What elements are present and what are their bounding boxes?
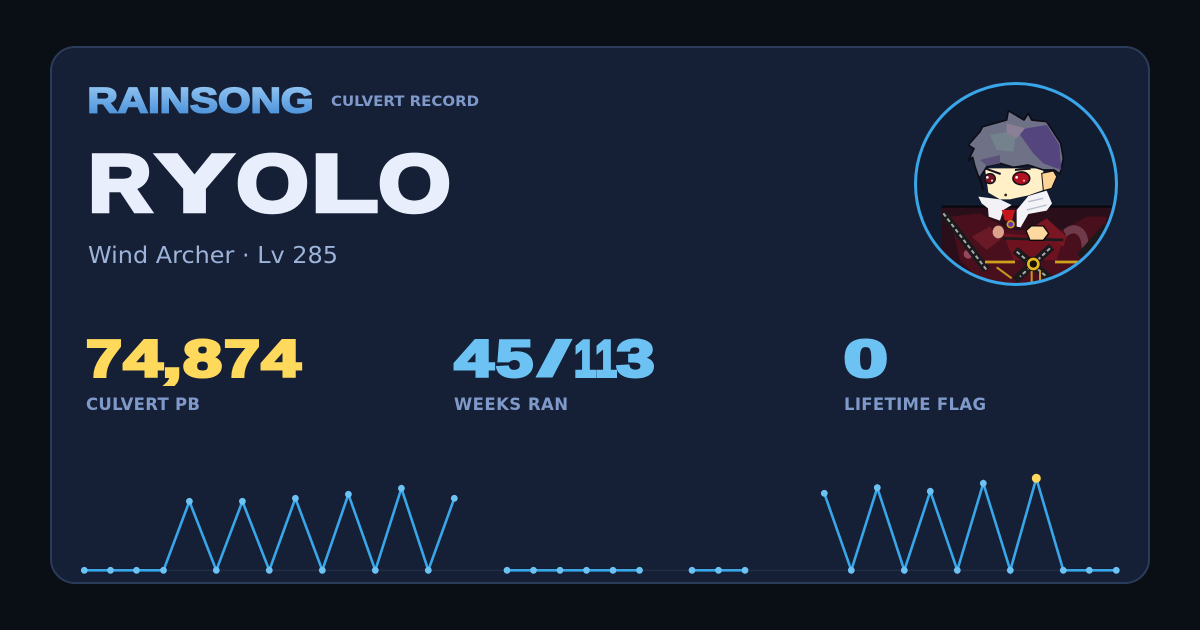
stat: culvert pb: CULVERT PB — [86, 395, 200, 414]
player name: Y — [156, 139, 232, 229]
panel: card — [51, 47, 1149, 583]
card infographic — [50, 46, 1150, 584]
stat: culvert pb: 4 — [124, 330, 163, 388]
icon: character avatar — [916, 84, 1116, 287]
stat: lifetime flag: 0 — [844, 330, 888, 388]
stat: weeks ran — [454, 330, 654, 414]
player name: O — [236, 139, 308, 229]
cape — [942, 208, 1112, 273]
stat: weeks ran: WEEKS RAN — [454, 395, 568, 414]
hair — [968, 111, 1063, 190]
ornate frame — [943, 213, 1107, 280]
player name: L — [312, 139, 378, 229]
stat: culvert pb: 8 — [183, 330, 222, 388]
brand logo: RAINSONG — [88, 80, 314, 120]
player name: R — [88, 139, 152, 229]
stat: lifetime flag — [844, 330, 986, 414]
stat: weeks ran: 4 — [454, 330, 494, 388]
stat: lifetime flag: LIFETIME FLAG — [844, 395, 986, 414]
collar — [978, 197, 1012, 221]
stat: weeks ran: 5 — [496, 330, 533, 388]
stat: weeks ran: 3 — [616, 330, 654, 388]
stat: weeks ran: / — [534, 330, 574, 388]
face — [985, 168, 1043, 199]
eyes — [985, 174, 995, 184]
player name: O — [378, 139, 450, 229]
stat: culvert pb: , — [162, 330, 182, 388]
stat: weeks ran: 1 — [595, 330, 617, 388]
stat: culvert pb: 7 — [86, 330, 122, 388]
class and level: Wind Archer · Lv 285 — [88, 241, 338, 269]
brand subtitle: CULVERT RECORD — [331, 94, 479, 110]
stat: culvert pb: 4 — [262, 330, 301, 388]
stat: weeks ran: 1 — [574, 330, 596, 388]
stat: culvert pb: 7 — [224, 330, 260, 388]
sparkline chart — [81, 474, 1120, 574]
hands — [993, 226, 1004, 238]
stat: culvert pb — [86, 330, 301, 414]
